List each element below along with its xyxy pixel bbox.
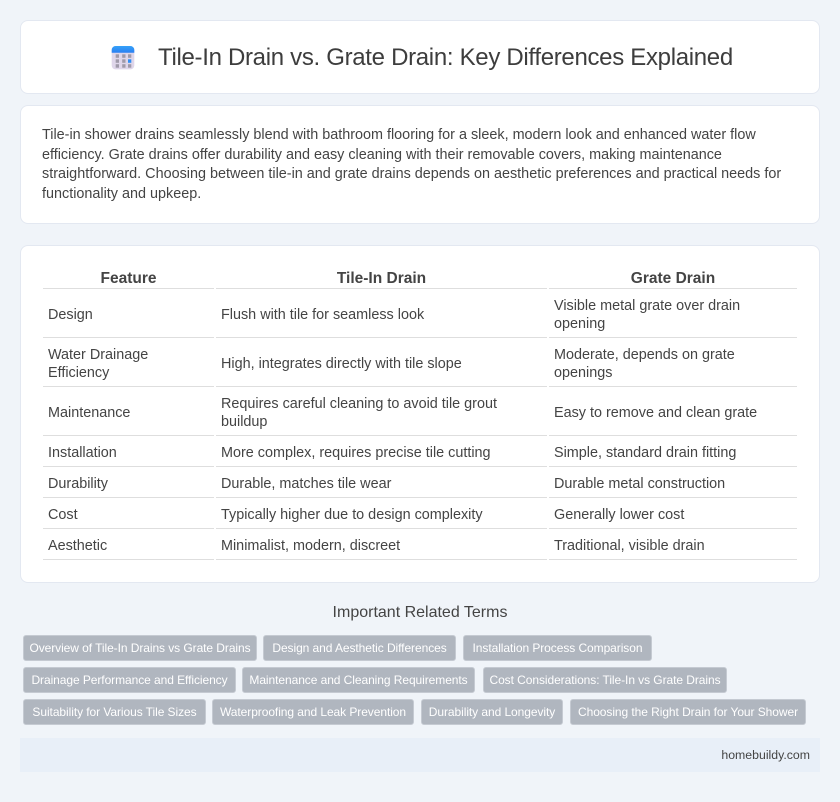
- comparison table: Flush with tile for seamless look: [221, 307, 424, 323]
- comparison table: Feature: [100, 270, 156, 287]
- footer source: homebuildy.com: [721, 748, 810, 762]
- intro panel: [20, 105, 820, 224]
- title: Tile-In Drain vs. Grate Drain: Key Differences Explained: [158, 44, 733, 71]
- comparison table: Tile-In Drain: [337, 270, 426, 287]
- comparison table: Maintenance: [48, 405, 130, 421]
- comparison table: Cost: [48, 507, 78, 523]
- comparison table: Aesthetic: [48, 538, 107, 554]
- comparison table panel: [20, 245, 820, 583]
- related terms tags: Suitability for Various Tile Sizes: [32, 705, 197, 719]
- comparison table: Design: [48, 307, 93, 323]
- comparison table: Minimalist, modern, discreet: [221, 538, 400, 554]
- intro text: efficiency. Grate drains offer durability and easy cleaning with their removable covers, making maintenance: [42, 147, 722, 163]
- header card: [20, 20, 820, 94]
- comparison table: Visible metal grate over drain: [554, 298, 740, 314]
- comparison table: Grate Drain: [631, 270, 715, 287]
- related terms tags: [23, 635, 806, 725]
- related terms tags: Drainage Performance and Efficiency: [31, 673, 228, 687]
- intro text: Tile-in shower drains seamlessly blend with bathroom flooring for a sleek, modern look and enhanced water flow: [42, 127, 756, 143]
- intro text: functionality and upkeep.: [42, 186, 201, 202]
- comparison table: Typically higher due to design complexity: [221, 507, 483, 523]
- comparison table: More complex, requires precise tile cutting: [221, 445, 491, 461]
- intro text: straightforward. Choosing between tile-in and grate drains depends on aesthetic preferences and practical needs for: [42, 166, 781, 182]
- related terms tags: Waterproofing and Leak Prevention: [220, 705, 406, 719]
- comparison table: Generally lower cost: [554, 507, 684, 523]
- comparison table: Efficiency: [48, 365, 109, 381]
- comparison table: openings: [554, 365, 612, 381]
- comparison table: Durable metal construction: [554, 476, 725, 492]
- comparison table: buildup: [221, 414, 267, 430]
- comparison table: opening: [554, 316, 605, 332]
- comparison table: Installation: [48, 445, 117, 461]
- comparison table: Durable, matches tile wear: [221, 476, 391, 492]
- comparison table: [43, 270, 797, 560]
- icon: calendar grid: [112, 46, 134, 70]
- related terms heading: Important Related Terms: [333, 604, 507, 621]
- comparison table: Simple, standard drain fitting: [554, 445, 736, 461]
- related terms tags: Choosing the Right Drain for Your Shower: [578, 705, 798, 719]
- related terms tags: Maintenance and Cleaning Requirements: [249, 673, 468, 687]
- comparison table: Water Drainage: [48, 347, 148, 363]
- footer bar: [20, 738, 820, 772]
- comparison table: Easy to remove and clean grate: [554, 405, 757, 421]
- related terms tags: Design and Aesthetic Differences: [272, 641, 447, 655]
- related terms tags: Cost Considerations: Tile-In vs Grate Drains: [489, 673, 720, 687]
- related terms tags: Overview of Tile-In Drains vs Grate Drains: [29, 641, 251, 655]
- comparison table: Moderate, depends on grate: [554, 347, 735, 363]
- comparison table: Traditional, visible drain: [554, 538, 705, 554]
- comparison table: Requires careful cleaning to avoid tile grout: [221, 396, 497, 412]
- related terms tags: Installation Process Comparison: [473, 641, 642, 655]
- comparison table: Durability: [48, 476, 108, 492]
- comparison table: High, integrates directly with tile slope: [221, 356, 462, 372]
- related terms tags: Durability and Longevity: [429, 705, 555, 719]
- intro text: [42, 127, 781, 202]
